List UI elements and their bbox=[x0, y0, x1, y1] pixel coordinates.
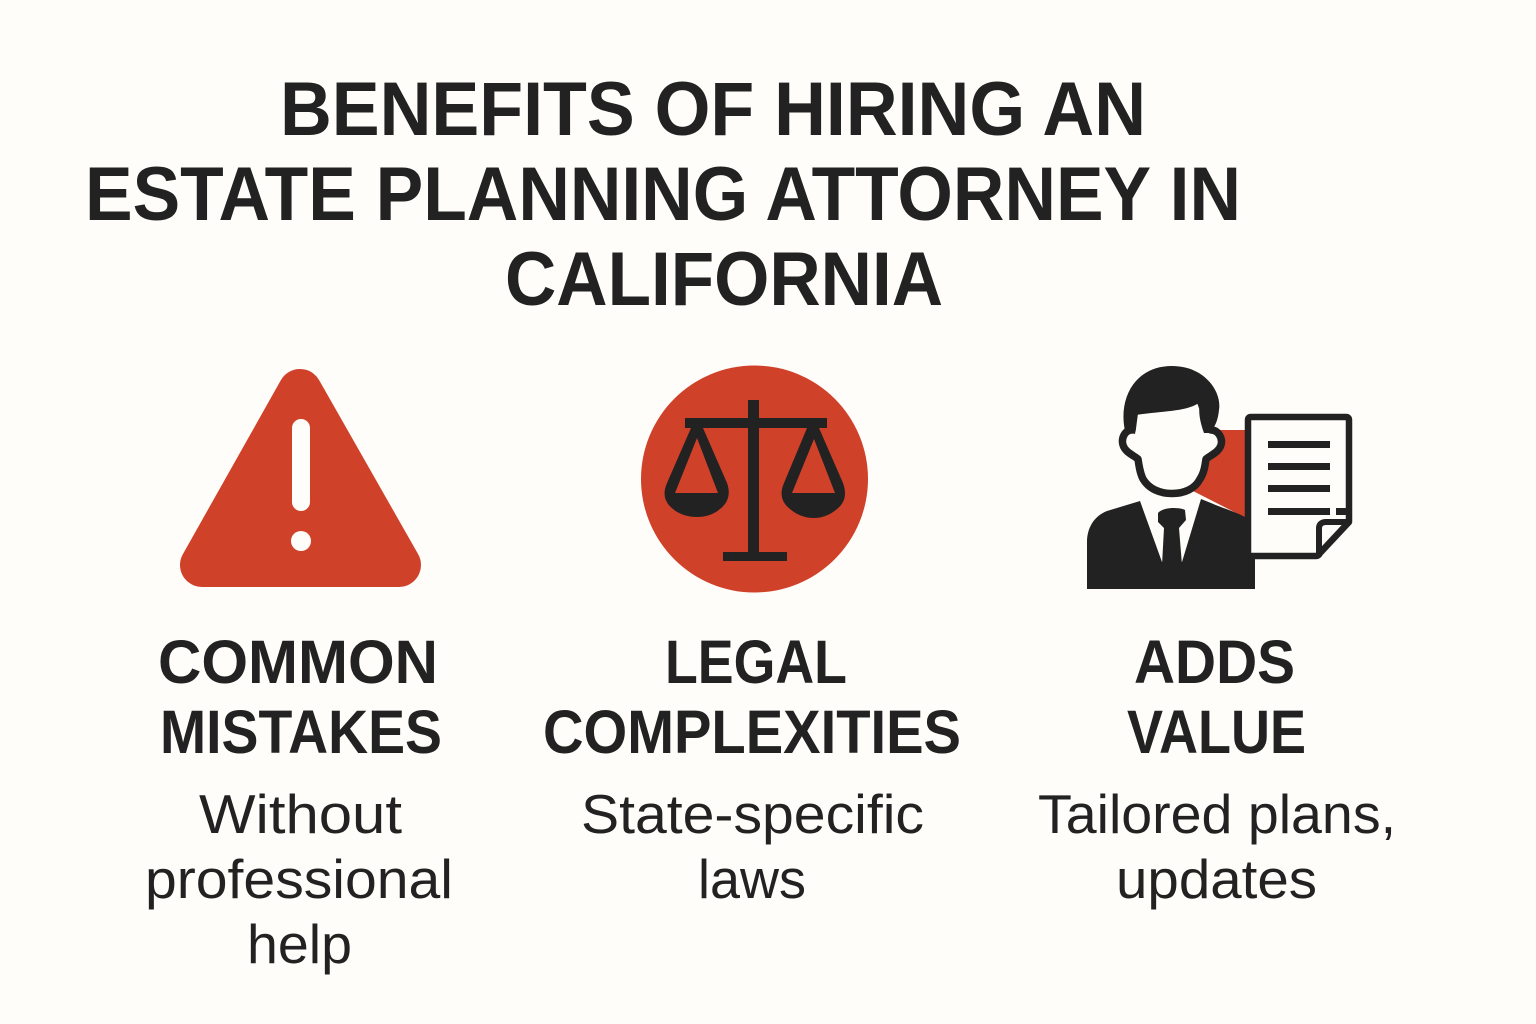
title: ESTATE PLANNING ATTORNEY IN bbox=[85, 152, 1241, 237]
text: legal complexities description bbox=[581, 783, 924, 910]
text: legal complexities description: State-specific bbox=[581, 783, 924, 845]
text: common mistakes description: professional bbox=[145, 848, 453, 910]
heading: common mistakes: COMMON bbox=[158, 628, 438, 696]
heading: adds value: ADDS bbox=[1134, 628, 1295, 696]
title: CALIFORNIA bbox=[505, 237, 943, 322]
text: legal complexities description: laws bbox=[698, 848, 806, 910]
title: BENEFITS OF HIRING AN bbox=[280, 67, 1146, 152]
heading: legal complexities: COMPLEXITIES bbox=[543, 698, 961, 766]
heading: legal complexities: LEGAL bbox=[665, 628, 847, 696]
heading: common mistakes: MISTAKES bbox=[160, 698, 442, 766]
heading: adds value bbox=[1127, 628, 1306, 766]
title bbox=[85, 67, 1241, 322]
heading: common mistakes bbox=[158, 628, 442, 766]
heading: legal complexities bbox=[543, 628, 961, 766]
column: adds value bbox=[1038, 628, 1396, 910]
heading: adds value: VALUE bbox=[1127, 698, 1306, 766]
icon: warning triangle bbox=[202, 391, 399, 565]
column: legal complexities bbox=[543, 628, 961, 910]
text: common mistakes description: Without bbox=[199, 783, 402, 845]
text: adds value description bbox=[1038, 783, 1396, 910]
text: adds value description: updates bbox=[1116, 848, 1317, 910]
icon: attorney with document bbox=[1087, 366, 1350, 589]
text: common mistakes description bbox=[145, 783, 453, 975]
text: common mistakes description: help bbox=[247, 913, 352, 975]
column: common mistakes bbox=[145, 628, 453, 975]
icon: scales of justice bbox=[641, 366, 868, 592]
text: adds value description: Tailored plans, bbox=[1038, 783, 1396, 845]
